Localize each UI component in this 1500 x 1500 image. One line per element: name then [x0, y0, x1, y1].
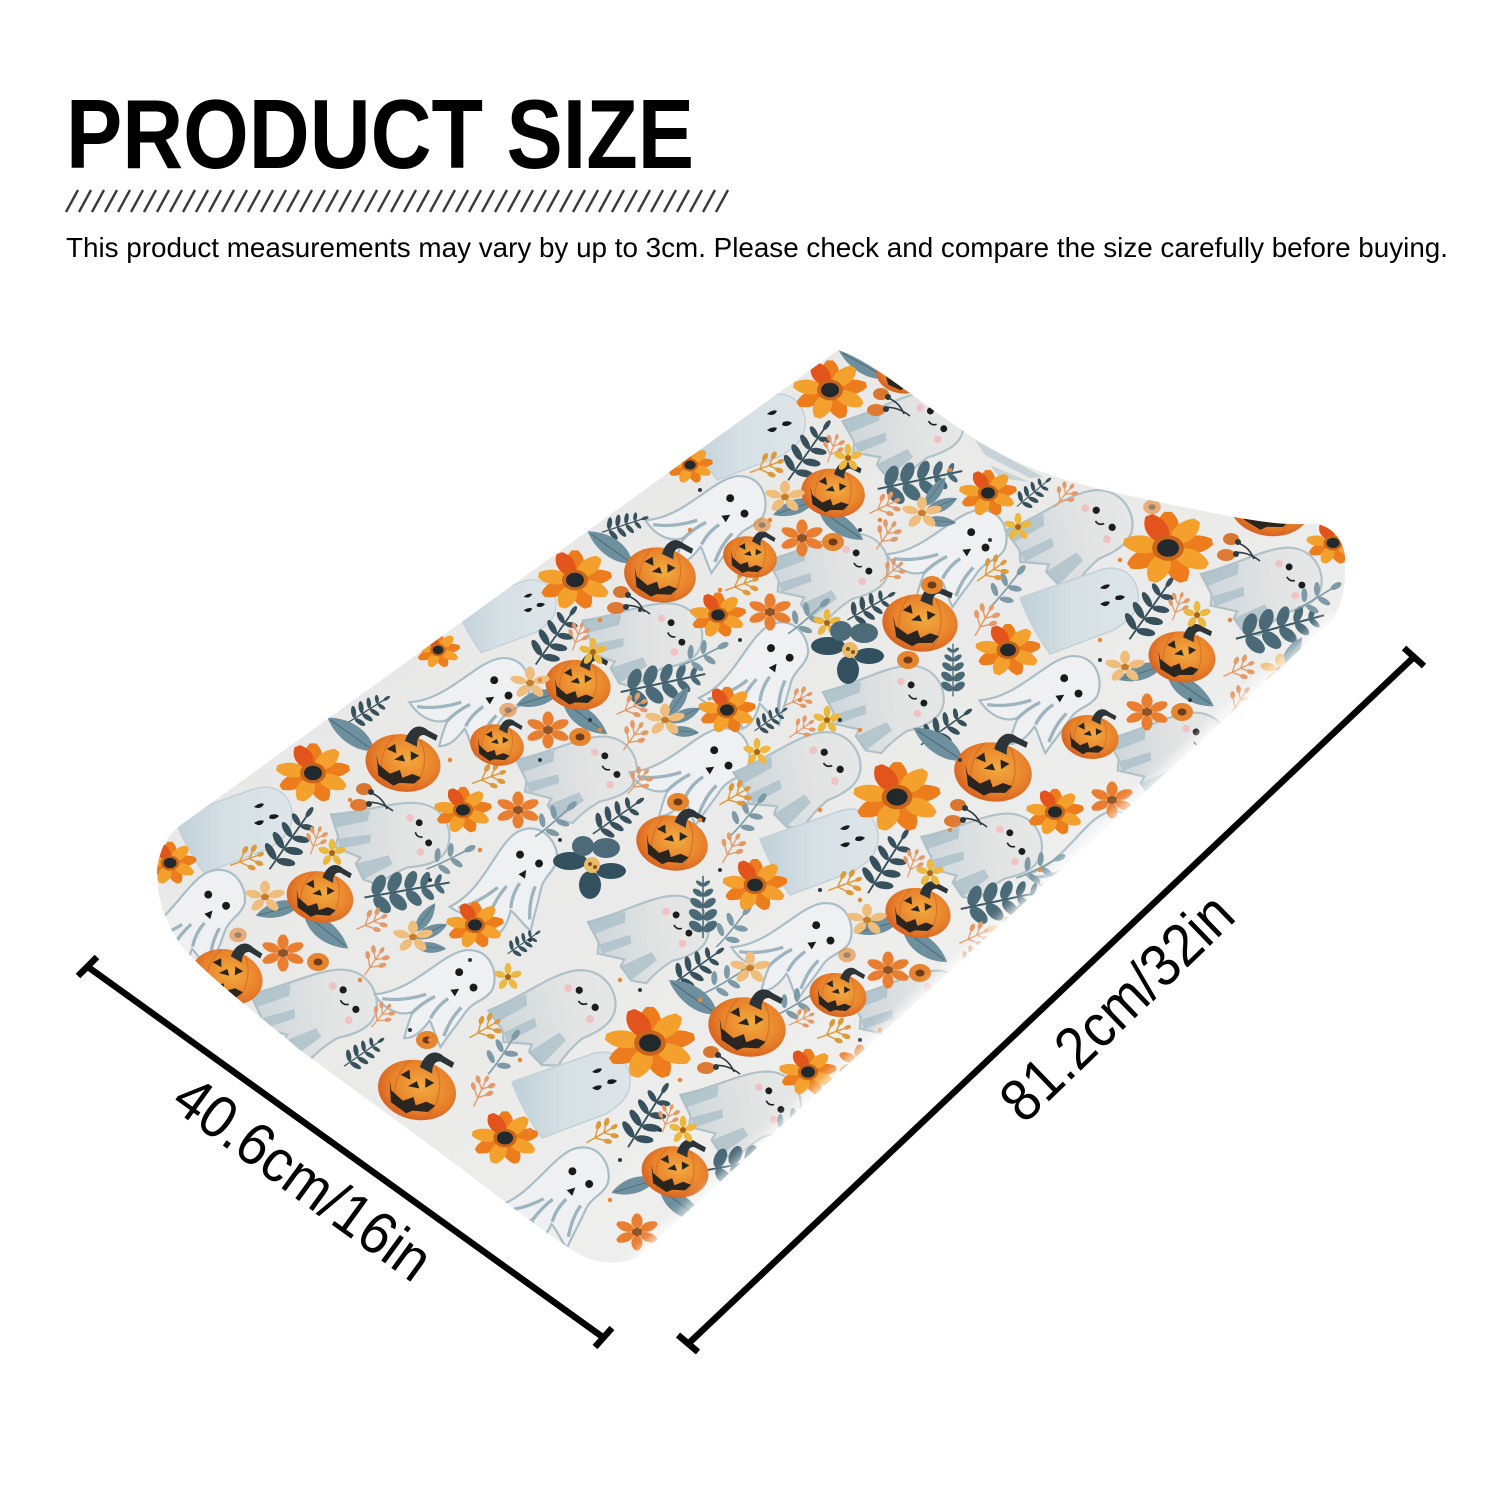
width dimension line — [78, 957, 612, 1347]
changing pad with ghost and pumpkin print — [121, 340, 1360, 1280]
coral twigs — [299, 430, 1260, 1219]
leaf clusters and pale stars — [244, 474, 1317, 984]
length dimension line — [678, 648, 1424, 1352]
small yellow flowers — [318, 444, 1211, 1143]
title: PRODUCT SIZE — [66, 79, 694, 189]
leaf sprigs — [254, 410, 1330, 1191]
dark blue flowers — [553, 621, 884, 899]
flowers — [143, 360, 1360, 1165]
disclaimer text: This product measurements may vary by up to 3cm. Please check and compare the size carefully before buying. — [66, 232, 1448, 263]
pumpkins — [185, 341, 1317, 1233]
length label: 81.2cm/32in — [987, 880, 1247, 1135]
hatched divider — [66, 190, 728, 212]
tiny round flowers — [229, 500, 1193, 1049]
seed pods — [350, 388, 1260, 1074]
star flowers — [260, 520, 1170, 1250]
golden twigs — [225, 447, 1015, 1155]
scattered dots — [350, 470, 1230, 1200]
width label: 40.6cm/16in — [161, 1063, 445, 1294]
soft edge highlight on the pad side — [640, 545, 1349, 1258]
ghosts — [121, 387, 1327, 1260]
thin teal sprigs — [420, 556, 1349, 1149]
